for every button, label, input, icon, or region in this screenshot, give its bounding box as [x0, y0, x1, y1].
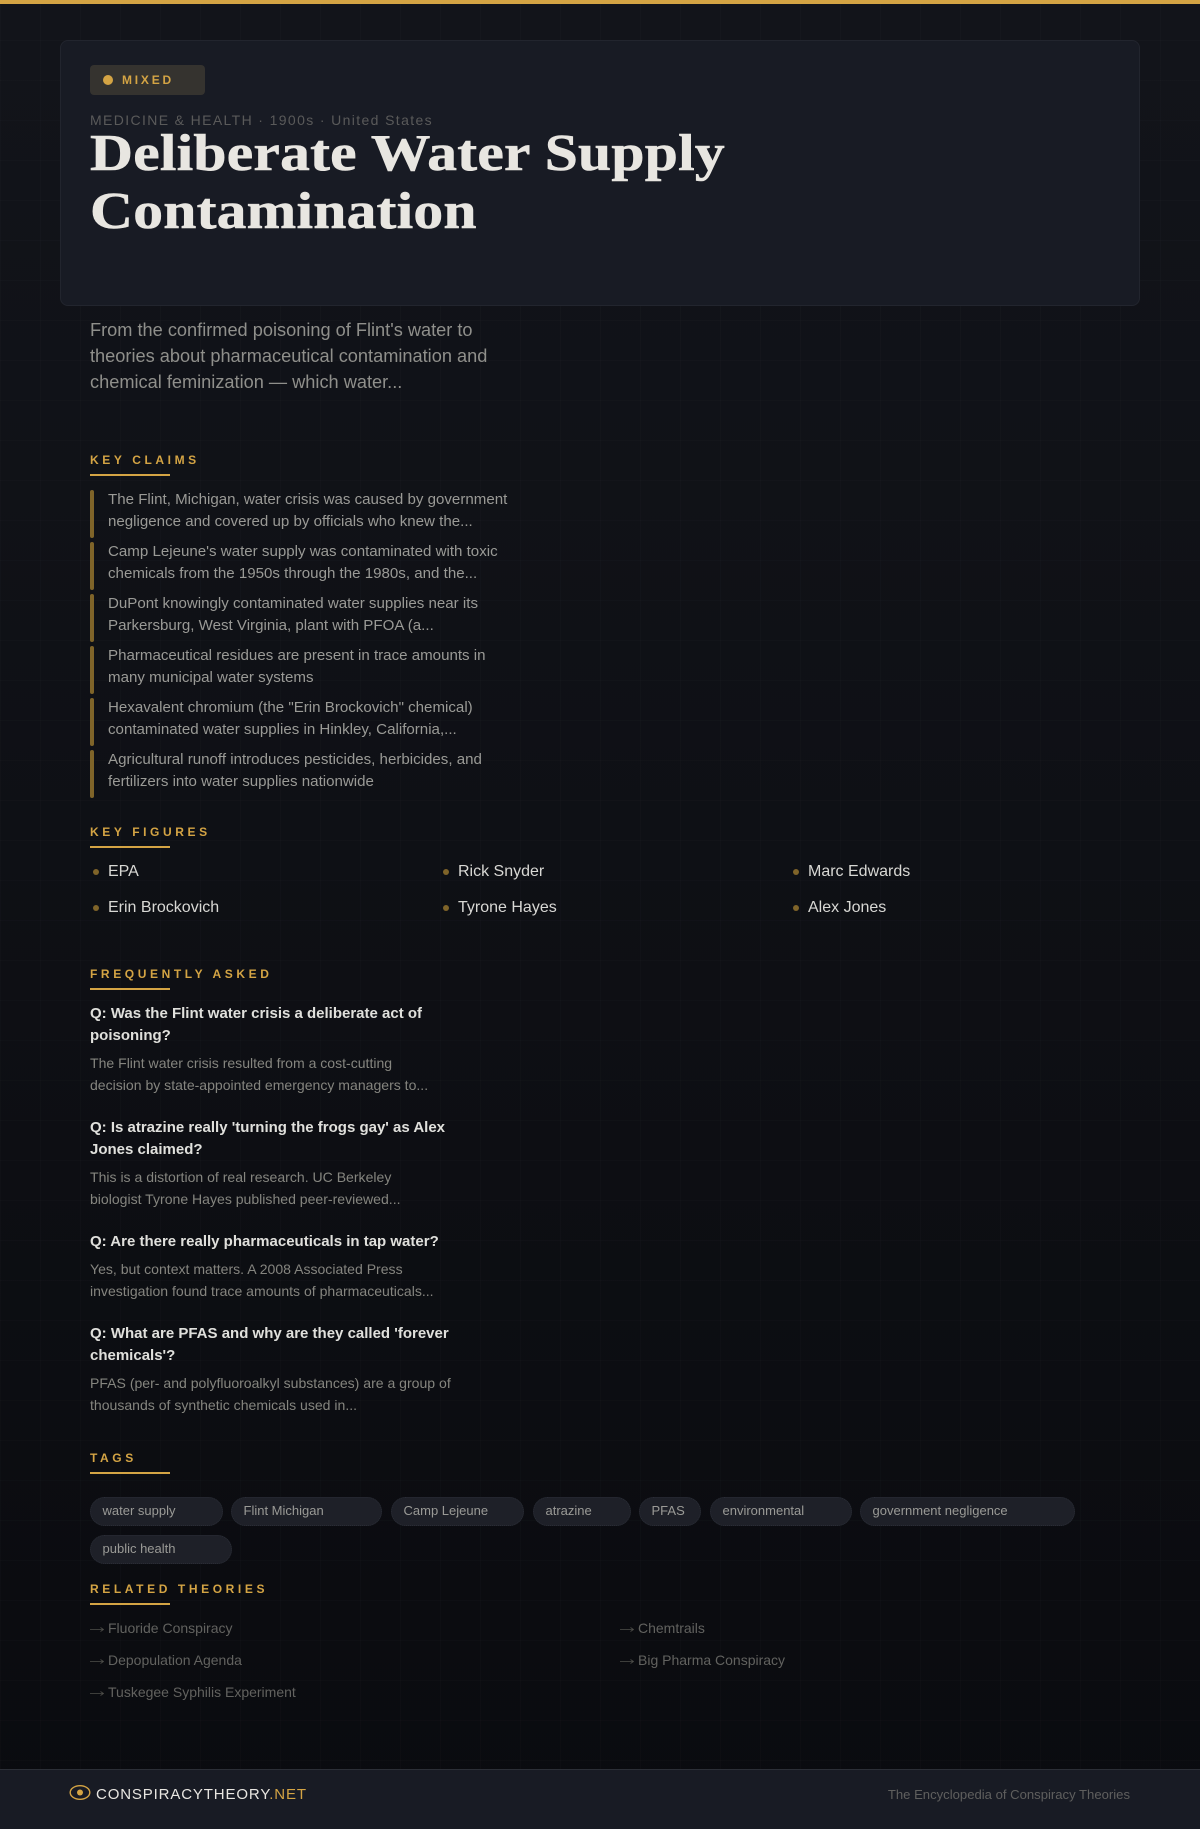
footer tagline: The Encyclopedia of Conspiracy Theories [888, 1787, 1130, 1802]
claim 5 [90, 698, 473, 746]
tag: atrazine [546, 1503, 592, 1518]
top accent bar [0, 0, 1200, 4]
heading: key figures: KEY FIGURES [90, 825, 211, 839]
answer 1 [90, 1055, 428, 1093]
figure: EPA: EPA [108, 863, 139, 880]
description: From the confirmed poisoning of Flint's water to [90, 320, 473, 340]
figure: Tyrone Hayes: Tyrone Hayes [458, 899, 557, 916]
answer 2 [90, 1169, 401, 1207]
claim 1: The Flint, Michigan, water crisis was caused by government [108, 491, 507, 508]
question 4: Q: What are PFAS and why are they called 'forever [90, 1325, 449, 1342]
heading: related theories: RELATED THEORIES [90, 1582, 268, 1596]
badge label: MIXED [122, 73, 174, 87]
claim 1 [90, 490, 508, 538]
figure: Alex Jones: Alex Jones [808, 899, 886, 916]
answer 4: PFAS (per- and polyfluoroalkyl substances) are a group of [90, 1375, 451, 1391]
answer 4: thousands of synthetic chemicals used in... [90, 1397, 357, 1413]
claim 6: fertilizers into water supplies nationwide [108, 773, 374, 790]
answer 3 [90, 1261, 434, 1299]
claim 3: DuPont knowingly contaminated water supplies near its [108, 595, 478, 612]
claim 5: Hexavalent chromium (the "Erin Brockovich" chemical) [108, 699, 473, 716]
question 2 [90, 1119, 445, 1158]
figure: Rick Snyder: Rick Snyder [458, 863, 544, 880]
claim 3: Parkersburg, West Virginia, plant with PFOA (a... [108, 617, 434, 634]
question 3: Q: Are there really pharmaceuticals in tap water? [90, 1233, 439, 1250]
tag [90, 1497, 223, 1526]
panel: header card [60, 40, 1140, 306]
answer 3: Yes, but context matters. A 2008 Associated Press [90, 1261, 403, 1277]
question 2: Q: Is atrazine really 'turning the frogs gay' as Alex [90, 1119, 445, 1136]
description: chemical feminization — which water... [90, 372, 402, 392]
answer 3: investigation found trace amounts of pharmaceuticals... [90, 1283, 434, 1299]
claim 6 [90, 750, 482, 798]
tag [90, 1535, 232, 1564]
panel: related theories list [90, 1620, 785, 1700]
claim 1: negligence and covered up by officials who knew the... [108, 513, 473, 530]
question 1: poisoning? [90, 1027, 171, 1044]
description: theories about pharmaceutical contamination and [90, 346, 487, 366]
related link: Depopulation Agenda [108, 1652, 242, 1668]
badge: mixed verdict [90, 65, 205, 95]
related link: Big Pharma Conspiracy [638, 1652, 785, 1668]
title: Deliberate Water Supply [90, 125, 725, 182]
answer 2: This is a distortion of real research. UC Berkeley [90, 1169, 391, 1185]
question 4 [90, 1325, 449, 1364]
tag: water supply [102, 1503, 175, 1518]
footer [0, 1769, 1200, 1829]
claim 4 [90, 646, 486, 694]
answer 1: The Flint water crisis resulted from a cost-cutting [90, 1055, 392, 1071]
tag [391, 1497, 524, 1526]
tag: public health [102, 1541, 176, 1556]
icon: eye logo [70, 1785, 90, 1800]
icon: badge dot [103, 75, 113, 85]
claim 2: Camp Lejeune's water supply was contaminated with toxic [108, 543, 498, 560]
figure: Marc Edwards: Marc Edwards [808, 863, 910, 880]
panel: key claims list [90, 490, 508, 798]
related link: Tuskegee Syphilis Experiment [108, 1684, 296, 1700]
figure: EPA [93, 863, 139, 880]
tag [231, 1497, 382, 1526]
title [90, 125, 725, 240]
tag: PFAS [652, 1503, 685, 1518]
category and era line: MEDICINE & HEALTH · 1900s · United States [90, 112, 433, 128]
tag: environmental [722, 1503, 804, 1518]
question 1 [90, 1005, 422, 1044]
claim 2 [90, 542, 498, 590]
heading: frequently asked: FREQUENTLY ASKED [90, 967, 273, 981]
answer 2: biologist Tyrone Hayes published peer-reviewed... [90, 1191, 401, 1207]
tag: Flint Michigan [244, 1503, 324, 1518]
tag [710, 1497, 852, 1526]
description [90, 320, 487, 392]
answer 4 [90, 1375, 451, 1413]
claim 4: Pharmaceutical residues are present in trace amounts in [108, 647, 486, 664]
question 4: chemicals'? [90, 1347, 175, 1364]
related link: Chemtrails [638, 1620, 705, 1636]
claim 3 [90, 594, 478, 642]
claim 2: chemicals from the 1950s through the 1980s, and the... [108, 565, 477, 582]
claim 4: many municipal water systems [108, 669, 314, 686]
related link: Fluoride Conspiracy [108, 1620, 232, 1636]
heading: key claims: KEY CLAIMS [90, 453, 200, 467]
tag: Camp Lejeune [404, 1503, 488, 1518]
panel: key figures grid [93, 863, 910, 916]
question 2: Jones claimed? [90, 1141, 203, 1158]
panel: tags [90, 1497, 1075, 1564]
tag [639, 1497, 701, 1526]
tag [860, 1497, 1075, 1526]
heading: tags: TAGS [90, 1451, 137, 1465]
tag: government negligence [872, 1503, 1008, 1518]
title: Contamination [90, 183, 477, 240]
claim 5: contaminated water supplies in Hinkley, California,... [108, 721, 457, 738]
tag [533, 1497, 631, 1526]
claim 6: Agricultural runoff introduces pesticides, herbicides, and [108, 751, 482, 768]
question 1: Q: Was the Flint water crisis a deliberate act of [90, 1005, 422, 1022]
footer brand: CONSPIRACYTHEORY.NET [96, 1786, 307, 1803]
answer 1: decision by state-appointed emergency managers to... [90, 1077, 428, 1093]
figure: Erin Brockovich: Erin Brockovich [108, 899, 219, 916]
